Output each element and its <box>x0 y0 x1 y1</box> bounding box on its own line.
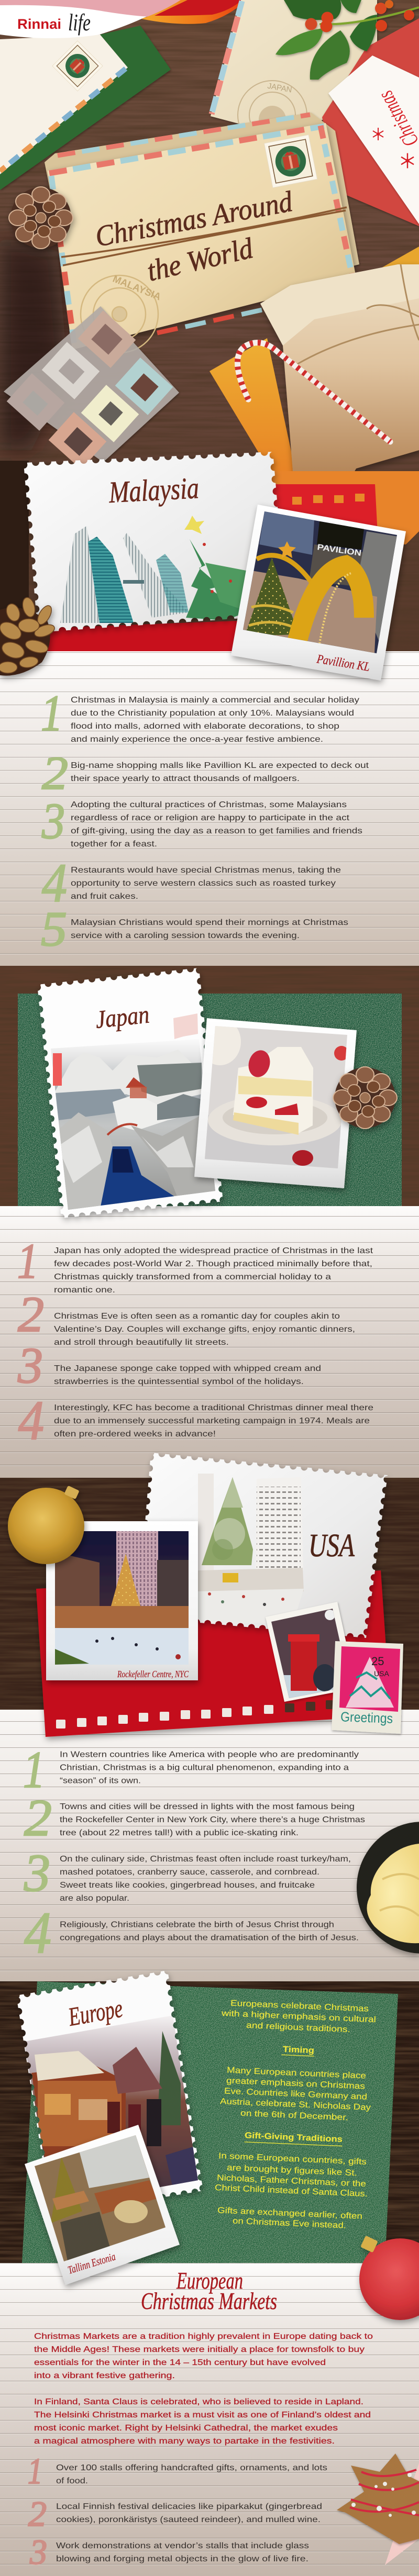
pine cone <box>333 1067 397 1129</box>
notebook paper: European markets <box>0 2263 419 2576</box>
logo: Rinnai life: Rinnai <box>17 16 61 32</box>
polaroid: Tallinn Estonia <box>25 2125 180 2285</box>
point 3: On the culinary side, Christmas feast often include roast turkey/ham, <box>60 1855 351 1864</box>
paragraph: history: essentials for the winter in the 14 – 15th century but have evolved <box>34 2358 326 2367</box>
wood background <box>0 0 419 651</box>
section: hero <box>0 0 419 651</box>
point 3: of gift-giving, using the day as a reason to get families and friends <box>71 827 362 835</box>
point 1: Christmas in Malaysia is mainly a commercial and secular holiday <box>71 696 359 705</box>
paragraph: history: the Middle Ages! These markets were initially a place for townsfolk to buy <box>34 2345 365 2354</box>
text block: intro <box>221 1999 376 2034</box>
notebook paper: Malaysia <box>0 651 419 966</box>
point 5: Malaysian Christians would spend their mornings at Christmas <box>71 918 348 927</box>
paragraph: Finland <box>34 2397 371 2446</box>
point 4: congregations and plays about the dramatisation of the birth of Jesus. <box>60 1934 359 1942</box>
point 3: 3 <box>17 1337 43 1394</box>
stamp paper <box>24 452 281 637</box>
postmark: Malaysia <box>81 274 163 353</box>
section: Japan notes <box>17 1233 373 1451</box>
point 4 <box>42 852 341 913</box>
paragraph: Finland: a magical atmosphere with many ways to partake in the festivities. <box>34 2437 335 2446</box>
point 2: Big-name shopping malls like Pavillion KL are expected to deck out <box>71 761 369 770</box>
text block: gift-giving: Nicholas, Father Christmas, or the <box>217 2173 366 2189</box>
pine cone <box>0 596 56 676</box>
envelope stack behind <box>45 113 359 335</box>
point 2: Towns and cities will be dressed in lights with the most famous being <box>60 1802 355 1811</box>
film holes <box>56 1700 333 1729</box>
point 2 <box>18 1286 355 1347</box>
point 1: “season” of its own. <box>60 1777 141 1785</box>
point 1: 1 <box>17 1233 38 1289</box>
envelope: airmail green backing <box>0 26 171 190</box>
text block: intro: with a higher emphasis on cultural <box>221 2009 376 2024</box>
pine cone <box>9 187 73 249</box>
holly <box>275 0 419 80</box>
stamp sheet <box>4 306 179 470</box>
point 1: few decades post-World War 2. Though practiced minimally before that, <box>54 1259 372 1268</box>
point 3: regardless of race or religion are happy to participate in the act <box>71 813 350 822</box>
twine <box>61 207 347 265</box>
notebook paper: USA <box>0 1710 419 1982</box>
title: Christmas Around <box>93 185 295 253</box>
polaroid: Rockefeller Centre: Rockefeller Centre, NYC <box>117 1669 189 1679</box>
point 1 <box>41 685 359 744</box>
point 2: cookies), poronkäristys (sauteed reindeer), and mulled wine. <box>56 2515 321 2524</box>
point 5: 5 <box>41 902 67 956</box>
point 4 <box>24 1901 359 1966</box>
parcel <box>260 264 419 484</box>
point 2: 2 <box>24 1789 52 1847</box>
point 1: Over 100 stalls offering handcrafted gifts, ornaments, and lots <box>56 2463 327 2472</box>
point 3 <box>29 2532 309 2572</box>
point 2: Local Finnish festival delicacies like piparkakut (gingerbread <box>56 2502 322 2511</box>
point 4: due to an immensely successful marketing campaign in 1974. Meals are <box>54 1417 370 1425</box>
paragraph: history <box>34 2332 373 2380</box>
illustration: Rockefeller tree <box>198 1474 304 1606</box>
section: USA notes <box>23 1741 419 1966</box>
stamp paper with mountain print <box>31 963 230 1225</box>
polaroid: Rockefeller Centre <box>46 1521 198 1680</box>
point 4: often pre-ordered weeks in advance! <box>54 1430 216 1438</box>
postmark: Malaysia: MALAYSIA <box>111 274 163 303</box>
point 1: and mainly experience the once-a-year festive ambience. <box>71 735 323 744</box>
point 2 <box>42 748 369 799</box>
text block: gift-giving: Christ Child instead of Santa Claus. <box>215 2183 368 2199</box>
point 4: Interestingly, KFC has become a traditional Christmas dinner meal there <box>54 1403 373 1412</box>
point 1: 1 <box>41 685 63 741</box>
stamp: Greetings: USA <box>374 1669 389 1678</box>
point 5 <box>41 902 348 956</box>
stamp paper with market <box>18 1971 205 2202</box>
point 3: are also popular. <box>60 1894 129 1903</box>
heading <box>141 2267 277 2314</box>
section: USA header <box>0 1445 419 1737</box>
text block: gift-giving <box>215 2151 368 2231</box>
text block: intro: Europeans celebrate Christmas <box>230 1999 369 2014</box>
point 2: Valentine’s Day. Couples will exchange gifts, enjoy romantic dinners, <box>54 1325 355 1334</box>
point 3: 3 <box>41 793 65 849</box>
point 1: romantic one. <box>54 1286 115 1295</box>
red bauble <box>359 2236 419 2320</box>
envelope: Japan postmark: JAPAN <box>267 82 293 95</box>
gold bauble <box>8 1486 84 1564</box>
heading: Gift-Giving Traditions: Gift-Giving Traditions <box>245 2131 343 2144</box>
main envelope <box>48 123 356 350</box>
heading: European <box>176 2267 243 2294</box>
text block: timing: greater emphasis on Christmas <box>226 2076 365 2091</box>
cartouche <box>53 1053 62 1086</box>
point 1: flood into malls, adorned with elaborate decorations, to shop <box>71 722 339 731</box>
paragraph: Finland: The Helsinki Christmas market is a must visit as one of Finland’s oldest and <box>34 2411 371 2419</box>
stamp: red postbox <box>265 1602 348 1703</box>
point 1: Christmas quickly transformed from a commercial holiday to a <box>54 1273 331 1281</box>
print: snowy gorge <box>51 1044 215 1210</box>
envelope: red <box>322 18 419 226</box>
text block: timing: Austria, celebrate St. Nicholas Day <box>220 2097 371 2112</box>
heading: Christmas Markets <box>141 2288 277 2314</box>
point 3: Work demonstrations at vendor’s stalls that include glass <box>56 2541 309 2550</box>
point 4: 4 <box>18 1390 44 1451</box>
point 3: 3 <box>24 1844 50 1903</box>
point 1: 1 <box>23 1741 45 1799</box>
point 1: In Western countries like America with people who are predominantly <box>60 1750 359 1759</box>
point 1: of food. <box>56 2477 88 2485</box>
brand header wave <box>0 0 246 38</box>
text block: gift-giving: In some European countries, gifts <box>218 2151 367 2167</box>
red paper strip <box>40 616 385 651</box>
point 3: Sweet treats like cookies, gingerbread houses, and fruitcake <box>60 1881 315 1890</box>
text block: intro: and religious traditions. <box>246 2021 350 2034</box>
point 3: Adopting the cultural practices of Christmas, some Malaysians <box>71 800 347 809</box>
paragraph: history: Christmas Markets are a tradition highly prevalent in Europe dating back to <box>34 2332 373 2341</box>
point 4: Religiously, Christians celebrate the birth of Jesus Christ through <box>60 1920 334 1930</box>
point 2 <box>24 1789 365 1847</box>
illustration: Christmas tree <box>184 516 251 620</box>
text block: gift-giving: on Christmas Eve instead. <box>233 2216 346 2231</box>
polaroid: strawberry sponge cake <box>194 1018 357 1188</box>
title: the World <box>144 232 257 288</box>
point 2: their space yearly to attract thousands of mallgoers. <box>71 774 300 783</box>
point 1 <box>23 1741 359 1799</box>
stamp: Greetings: 25 <box>371 1655 384 1668</box>
point 1: Christian, Christmas is a big cultural phenomenon, expanding into a <box>60 1763 349 1772</box>
point 4: and fruit cakes. <box>71 892 138 901</box>
paragraph: Finland: most iconic market. Right by Helsinki Cathedral, the market exudes <box>34 2424 338 2433</box>
notebook paper: Japan <box>0 1206 419 1478</box>
point 3: 3 <box>29 2532 47 2572</box>
yellow paper <box>210 247 419 484</box>
point 2: the Rockefeller Center in New York City, where there’s a huge Christmas <box>60 1815 365 1824</box>
section: European Christmas Markets <box>28 2236 419 2572</box>
title: Malaysia: Malaysia <box>107 471 200 509</box>
green felt panel <box>22 1981 398 2263</box>
point 1: Japan has only adopted the widespread practice of Christmas in the last <box>54 1246 373 1255</box>
market photo <box>25 2015 198 2187</box>
point 2: 2 <box>28 2494 47 2534</box>
point 2: 2 <box>42 748 68 799</box>
point 3: mashed potatoes, cranberry sauce, casserole, and cornbread. <box>60 1868 319 1877</box>
illustration: Petronas towers <box>60 526 189 623</box>
polaroid: Tallinn Estonia: Tallinn Estonia <box>66 2250 117 2277</box>
point 1: 1 <box>28 2451 42 2492</box>
plate of mashed potato <box>357 1822 419 1954</box>
red envelope with film holes <box>36 1570 389 1737</box>
point 4: Restaurants would have special Christmas menus, taking the <box>71 866 341 875</box>
section: Malaysia notes <box>0 596 369 956</box>
text block: gift-giving: are brought by figures like St. <box>227 2164 357 2178</box>
polaroid: Pavilion KL: PAVILION <box>316 543 362 558</box>
point 2: and stroll through beautifully lit streets. <box>54 1338 229 1347</box>
point 3: The Japanese sponge cake topped with whipped cream and <box>54 1364 321 1373</box>
point 3 <box>24 1844 351 1903</box>
section: Europe header <box>0 1963 419 2285</box>
title: Japan: Japan <box>94 1000 151 1034</box>
heading: Timing: Timing <box>283 2045 314 2055</box>
point 2 <box>28 2494 322 2534</box>
section: Malaysia header <box>16 445 419 681</box>
text block: timing: Eve. Countries like Germany and <box>224 2087 367 2102</box>
point 4: 4 <box>42 852 67 913</box>
point 5: service with a caroling session towards the evening. <box>71 931 300 940</box>
candy cane <box>237 343 390 442</box>
logo: Rinnai life <box>17 9 91 36</box>
wood background <box>0 1478 419 1710</box>
point 3 <box>17 1337 321 1394</box>
envelope: white top left <box>0 35 128 174</box>
title: USA: USA <box>308 1528 355 1564</box>
paragraph: history: into a vibrant festive gathering. <box>34 2371 175 2380</box>
section: Japan header <box>0 963 419 1225</box>
point 3: together for a feast. <box>71 840 157 849</box>
wood background <box>0 1981 419 2263</box>
stamp: gift on envelope <box>264 135 317 188</box>
point 1 <box>17 1233 373 1295</box>
wood background <box>0 966 419 1206</box>
text block: timing <box>220 2066 371 2122</box>
stamp: Greetings: Greetings <box>340 1709 393 1726</box>
point 1 <box>28 2451 327 2492</box>
point 2: tree (about 22 metres tall!) with a public ice-skating rink. <box>60 1828 299 1837</box>
point 1: due to the Christianity population at only 10%. Malaysians would <box>71 709 354 718</box>
title: Europe: Europe <box>65 1993 125 2032</box>
point 3: strawberries is the quintessential symbol of the holidays. <box>54 1377 304 1386</box>
text block: gift-giving: Gifts are exchanged earlier, often <box>217 2206 362 2221</box>
green felt panel <box>18 994 402 1206</box>
greeting card <box>328 55 419 224</box>
point 4 <box>18 1390 373 1451</box>
paragraph: Finland: In Finland, Santa Claus is celebrated, who is believed to reside in Lapland. <box>34 2397 363 2406</box>
point 4: 4 <box>24 1901 51 1966</box>
point 2: 2 <box>18 1286 44 1342</box>
point 2: Christmas Eve is often seen as a romantic day for couples akin to <box>54 1312 340 1321</box>
polaroid: Pavilion KL: Pavillion KL <box>315 652 371 674</box>
orange paper and red film strip <box>272 471 419 550</box>
pale pink corner <box>173 1013 198 1039</box>
stamp: Greetings <box>332 1641 403 1734</box>
text block: timing: Many European countries place <box>227 2066 366 2081</box>
point 3: blowing and forging metal objects in the glow of live fire. <box>56 2555 308 2563</box>
polaroid: Pavilion KL <box>230 503 409 681</box>
point 4: opportunity to serve western classics such as roasted turkey <box>71 879 336 888</box>
title <box>93 185 295 288</box>
point 3 <box>41 793 362 849</box>
gingerbread cookie <box>337 2454 419 2565</box>
logo: Rinnai life: life <box>68 9 91 36</box>
text block: timing: on the 6th of December. <box>240 2109 348 2122</box>
envelope: Japan postmark <box>211 0 377 150</box>
stamp paper <box>145 1453 388 1642</box>
